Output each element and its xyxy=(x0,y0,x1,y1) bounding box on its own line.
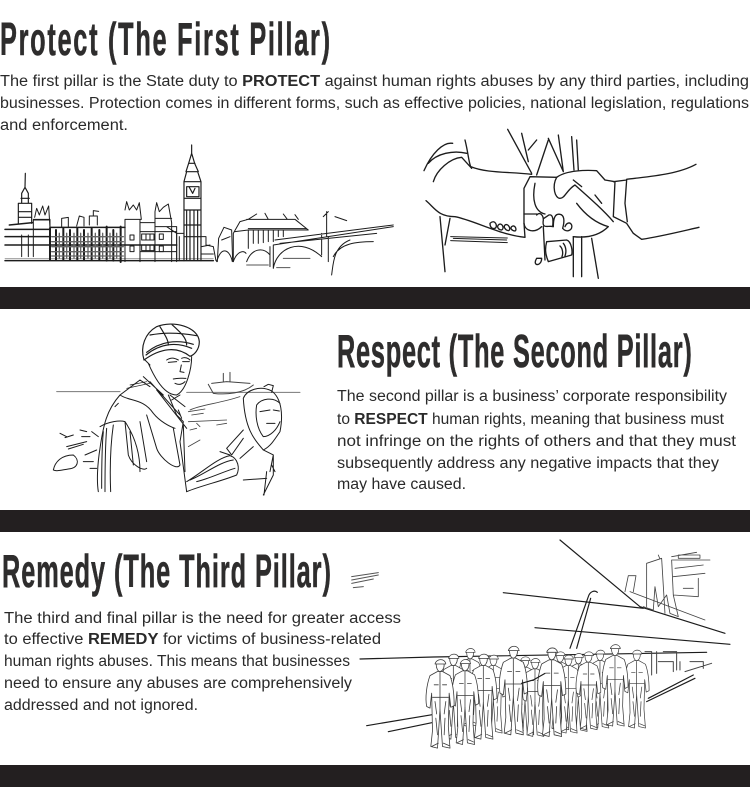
illustration: two young people on a shoreline xyxy=(53,324,300,495)
text block: third pillar description: need to ensure any abuses are comprehensively xyxy=(4,675,352,692)
text block: first pillar description: The first pillar is the State duty to PROTECT against human rights abuses by any third parties, including xyxy=(0,73,749,90)
title: Remedy (The Third Pillar): Remedy (The Third Pillar) xyxy=(2,545,331,597)
text block: second pillar description: subsequently address any negative impacts that they xyxy=(337,455,719,472)
black divider bar 3 xyxy=(0,765,750,787)
text block: second pillar description: may have caused. xyxy=(337,476,466,493)
text block: first pillar description: and enforcement. xyxy=(0,117,128,134)
black divider bar 1 xyxy=(0,287,750,309)
text block: second pillar description: to RESPECT human rights, meaning that business must xyxy=(337,411,725,428)
text block: second pillar description: not infringe on the rights of others and that they must xyxy=(337,433,737,450)
text block: third pillar description: human rights abuses. This means that businesses xyxy=(4,653,350,670)
text block: third pillar description xyxy=(4,610,401,714)
text block: third pillar description: The third and final pillar is the need for greater access xyxy=(4,610,401,627)
text block: third pillar description: addressed and not ignored. xyxy=(4,697,198,714)
text block: second pillar description xyxy=(337,388,737,493)
illustration: shipyard workers group xyxy=(352,540,730,748)
text block: first pillar description: businesses. Protection comes in different forms, such as effective policies, national legislation, regulations xyxy=(0,95,749,112)
illustration: handshake xyxy=(424,129,699,278)
title: Respect (The Second Pillar): Respect (The Second Pillar) xyxy=(337,325,692,377)
black divider bar 2 xyxy=(0,510,750,532)
text block: second pillar description: The second pillar is a business’ corporate responsibility xyxy=(337,388,727,405)
text block: first pillar description xyxy=(0,73,749,134)
text block: third pillar description: to effective REMEDY for victims of business-related xyxy=(4,631,381,648)
illustration: Westminster skyline xyxy=(5,145,393,275)
title: Protect (The First Pillar): Protect (The First Pillar) xyxy=(0,13,330,65)
